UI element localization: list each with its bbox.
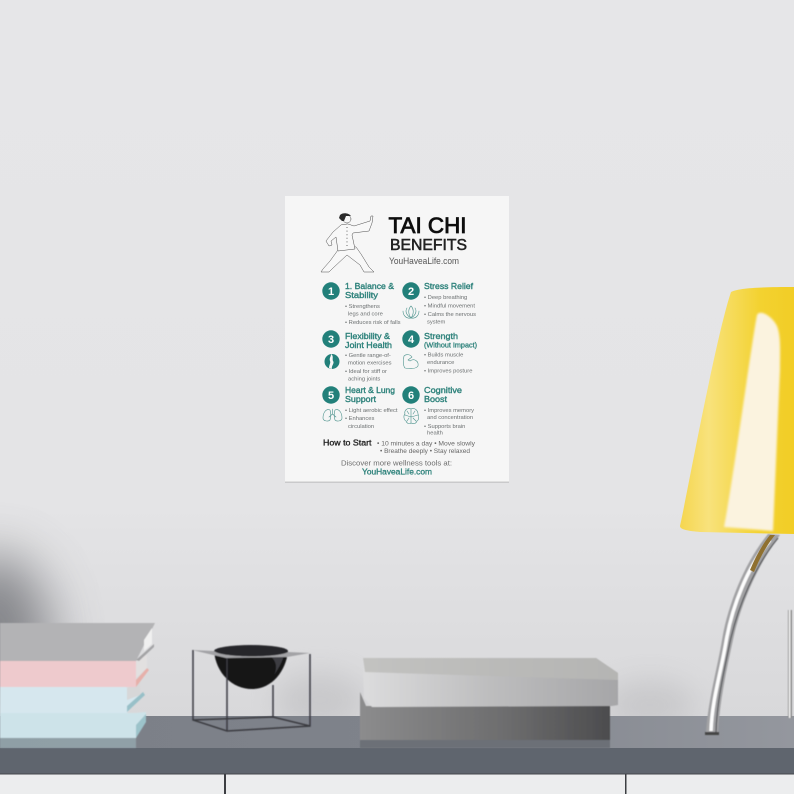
title	[388, 213, 467, 267]
benefit 2: stress relief: 2	[408, 286, 414, 298]
benefit 1: balance and stability: 1. Balance &	[345, 281, 394, 291]
title: TAI CHI	[388, 213, 466, 238]
benefit 6: cognitive boost: Cognitive	[424, 385, 462, 395]
lamp arm top accent	[750, 535, 775, 572]
benefit 4: strength: • Improves posture	[424, 368, 472, 374]
figure: tai chi pose illustration	[321, 213, 374, 272]
benefit 2: stress relief: • Mindful movement	[424, 304, 475, 310]
benefit 1: balance and stability: • Reduces risk of falls	[345, 320, 401, 326]
footer call to action: YouHaveaLife.com	[362, 468, 432, 476]
benefit 6: cognitive boost: • Improves memory	[424, 408, 474, 414]
benefit 1: balance and stability: 1	[328, 286, 334, 298]
cabinet drawers	[0, 774, 794, 794]
benefit 1: balance and stability: Stability	[345, 290, 379, 300]
benefit 4: strength: 4	[408, 334, 415, 346]
black bowl in metal frame	[192, 645, 310, 731]
benefit 3: flexibility and joint health: • Gentle range-of-	[345, 353, 391, 359]
benefit 6: cognitive boost: • Supports brain	[424, 424, 465, 430]
icon: flexed arm	[403, 355, 418, 369]
lamp shade	[680, 287, 794, 534]
stacked grey books right	[360, 658, 618, 748]
icon: lungs	[323, 409, 342, 421]
benefit 6: cognitive boost: 6	[408, 390, 414, 402]
title: BENEFITS	[390, 237, 467, 254]
benefit 6: cognitive boost: and concentration	[427, 415, 473, 421]
benefit 5: heart and lung support: 5	[328, 390, 334, 402]
how to start: How to Start	[323, 438, 372, 448]
wall shadows	[0, 555, 695, 730]
benefit 4: strength: Strength	[424, 331, 458, 341]
benefit 6: cognitive boost	[402, 385, 474, 436]
title: YouHaveaLife.com	[389, 256, 459, 267]
how to start: • 10 minutes a day • Move slowly	[377, 440, 476, 448]
benefit 2: stress relief: • Deep breathing	[424, 295, 467, 301]
benefit 1: balance and stability: • Strengthens	[345, 304, 380, 310]
benefit 5: heart and lung support: • Enhances	[345, 416, 375, 422]
icon: brain	[404, 408, 419, 424]
how to start: • Breathe deeply • Stay relaxed	[380, 448, 470, 455]
benefit 5: heart and lung support: Heart & Lung	[345, 385, 395, 395]
benefit 3: flexibility and joint health	[322, 330, 392, 382]
benefit 5: heart and lung support: Support	[345, 394, 377, 404]
benefit 3: flexibility and joint health: Flexibility &	[345, 331, 390, 341]
benefit 3: flexibility and joint health: Joint Health	[345, 340, 392, 350]
benefit 5: heart and lung support	[322, 385, 398, 430]
benefit 3: flexibility and joint health: motion exercises	[348, 360, 392, 366]
benefit 3: flexibility and joint health: • Ideal for stiff or	[345, 369, 387, 375]
benefit 2: stress relief: Stress Relief	[424, 281, 474, 291]
icon: joint	[324, 354, 340, 369]
how to start	[323, 438, 476, 455]
benefit 5: heart and lung support: circulation	[348, 424, 374, 430]
benefit 3: flexibility and joint health: 3	[328, 334, 334, 346]
benefit 2: stress relief: system	[427, 320, 446, 326]
benefit 4: strength: (Without Impact)	[424, 342, 477, 350]
benefit 1: balance and stability: legs and core	[348, 312, 383, 318]
benefit 4: strength: endurance	[427, 360, 454, 366]
benefit 2: stress relief: • Calms the nervous	[424, 312, 476, 318]
icon: lotus	[403, 306, 419, 318]
benefit 2: stress relief	[402, 281, 476, 326]
poster	[285, 196, 509, 483]
benefit 4: strength: • Builds muscle	[424, 352, 463, 358]
benefit 6: cognitive boost: Boost	[424, 394, 448, 404]
benefit 3: flexibility and joint health: aching joints	[348, 376, 380, 382]
footer call to action	[341, 458, 452, 476]
benefit 1: balance and stability	[322, 281, 401, 326]
shelf	[0, 716, 794, 774]
benefit 4: strength	[402, 330, 477, 374]
footer call to action: Discover more wellness tools at:	[341, 458, 452, 468]
lamp arm	[705, 534, 792, 735]
benefit 5: heart and lung support: • Light aerobic effect	[345, 408, 398, 414]
stack of books left	[0, 623, 155, 748]
benefit 6: cognitive boost: health	[427, 430, 443, 436]
